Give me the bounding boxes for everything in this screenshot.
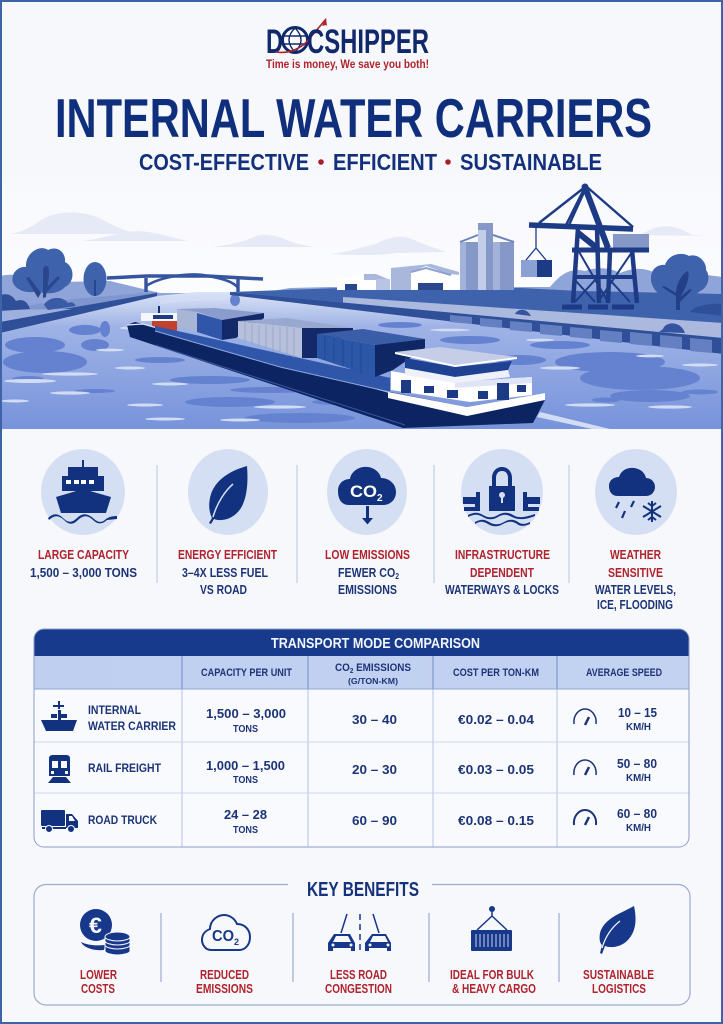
right tree [651,254,723,316]
subtitle [139,149,602,175]
icon: gauge [574,709,596,725]
icon: truck [41,810,78,832]
subtitle: EFFICIENT [333,149,438,175]
icon: co2 outline cloud: 2 [234,937,239,947]
row: road truck: KM/H [626,823,651,834]
feature: weather sensitive: ICE, FLOODING [597,598,673,612]
benefit: bulk and heavy cargo [450,906,536,996]
benefit: bulk and heavy cargo: IDEAL FOR BULK [450,968,534,982]
table header row: CO [335,662,352,674]
row: road truck [41,807,657,836]
row: internal water carrier: KM/H [626,722,651,733]
row: road truck: ROAD TRUCK [88,813,157,827]
row: rail freight [48,755,657,786]
icon row [30,449,677,612]
row: internal water carrier: TONS [233,724,258,735]
icon: leaf [600,906,636,954]
feature: infrastructure dependent: INFRASTRUCTURE [455,548,550,562]
row: road truck: 60 – 90 [352,814,397,828]
row: internal water carrier: 10 – 15 [618,706,657,720]
heading: KEY BENEFITS [307,879,419,901]
row: rail freight: 1,000 – 1,500 [206,759,285,773]
feature: low emissions: FEWER CO [338,566,405,580]
feature: low emissions [325,449,410,597]
icon: canal lock [463,467,540,526]
icon: gauge [574,810,596,825]
panel: key benefits [34,879,690,1005]
feature: energy efficient: VS ROAD [200,583,247,597]
clouds [11,212,705,255]
feature: low emissions: LOW EMISSIONS [325,548,410,562]
logo: DocShipper: Time is money, We save you both! [266,59,429,71]
benefit: lower costs: COSTS [81,982,115,996]
table header row: EMISSIONS [353,662,411,674]
feature: energy efficient: 3–4X LESS FUEL [182,566,268,580]
warehouses [337,264,460,290]
left bank [0,292,157,333]
benefit: sustainable logistics [583,906,654,996]
feature: weather sensitive: SENSITIVE [608,566,663,580]
right bank land [230,288,723,338]
icon: ship small [41,701,77,731]
row: rail freight: 50 – 80 [617,757,657,771]
row: rail freight: €0.03 – 0.05 [458,763,534,777]
icon: leaf [209,466,247,524]
table header row: 2 [350,668,353,675]
comparison table [34,629,689,847]
feature: energy efficient: ENERGY EFFICIENT [178,548,277,562]
row: internal water carrier: 1,500 – 3,000 [206,707,286,721]
table header row: COST PER TON-KM [453,667,539,679]
canal wall right [230,292,723,354]
icon: hoisted container [471,906,512,951]
hero illustration: barge on canal [0,178,723,429]
left trees [12,248,106,298]
benefit: sustainable logistics: SUSTAINABLE [583,968,654,982]
table header row: AVERAGE SPEED [586,667,662,679]
icon: co2 cloud: CO [350,482,377,501]
icon: train [48,755,71,783]
feature: low emissions: EMISSIONS [338,583,397,597]
icon: gauge [574,760,596,775]
benefit: lower costs [80,909,130,996]
feature: weather sensitive: WATER LEVELS, [595,583,676,597]
icon: euro coins: € [89,913,102,938]
water [0,292,723,429]
row: road truck: €0.08 – 0.15 [458,814,534,828]
row: rail freight: KM/H [626,773,651,784]
row: rail freight: TONS [233,775,258,786]
stern cabin [158,306,160,313]
deckhouse [391,371,532,402]
table header row: (G/TON-KM) [348,676,398,686]
benefit: reduced emissions [196,915,253,996]
silos [460,223,514,290]
row: rail freight: 20 – 30 [352,763,397,777]
icon: rain and snow [609,468,661,522]
table title: TRANSPORT MODE COMPARISON [271,636,480,652]
icon: co2 outline cloud [202,915,250,950]
row: internal water carrier: INTERNAL [88,703,141,717]
feature: infrastructure dependent [445,449,559,597]
containers [177,309,197,331]
benefit: less road congestion: LESS ROAD [330,968,387,982]
row: internal water carrier [41,701,657,735]
subtitle: SUSTAINABLE [460,149,602,175]
hull [127,322,545,428]
feature: large capacity: LARGE CAPACITY [38,548,130,562]
deck strip [155,326,390,392]
barge [127,306,545,428]
row: road truck: 24 – 28 [224,808,267,822]
feature: large capacity: 1,500 – 3,000 TONS [30,566,137,580]
reflections light [1,294,718,429]
benefit: less road congestion: CONGESTION [325,982,392,996]
crane [521,184,649,307]
bridge [107,274,263,292]
benefit: less road congestion [325,914,392,996]
icon: ship [48,460,117,524]
row: road truck: TONS [233,825,258,836]
logo: DocShipper [266,18,429,71]
benefit: reduced emissions: REDUCED [200,968,249,982]
benefit: reduced emissions: EMISSIONS [196,982,253,996]
benefit: lower costs: LOWER [80,968,117,982]
logo: DocShipper: D [266,23,283,61]
icon: co2 outline cloud: CO [212,928,234,945]
row: road truck: 60 – 80 [617,807,657,821]
subtitle: COST-EFFECTIVE [139,149,309,175]
row: rail freight: RAIL FREIGHT [88,761,162,775]
feature: weather sensitive [595,449,677,612]
feature: weather sensitive: WEATHER [610,548,661,562]
feature: low emissions: 2 [395,572,399,581]
row: internal water carrier: WATER CARRIER [88,719,176,733]
row: internal water carrier: 30 – 40 [352,713,397,727]
feature: infrastructure dependent: DEPENDENT [470,566,534,580]
benefit: sustainable logistics: LOGISTICS [592,982,646,996]
icon: co2 cloud [338,467,396,524]
row: internal water carrier: €0.02 – 0.04 [458,713,534,727]
feature: energy efficient [178,449,277,597]
table header row: CAPACITY PER UNIT [201,667,292,679]
table header row [201,662,662,686]
logo: DocShipper: CSHIPPER [307,23,429,61]
feature: infrastructure dependent: WATERWAYS & LOCKS [445,583,559,597]
far treeline [0,268,723,317]
benefit: bulk and heavy cargo: & HEAVY CARGO [452,982,536,996]
icon: co2 cloud: 2 [377,493,383,504]
reflections dark [3,294,718,423]
icon: two cars on road [328,914,391,951]
feature: large capacity [30,449,137,580]
